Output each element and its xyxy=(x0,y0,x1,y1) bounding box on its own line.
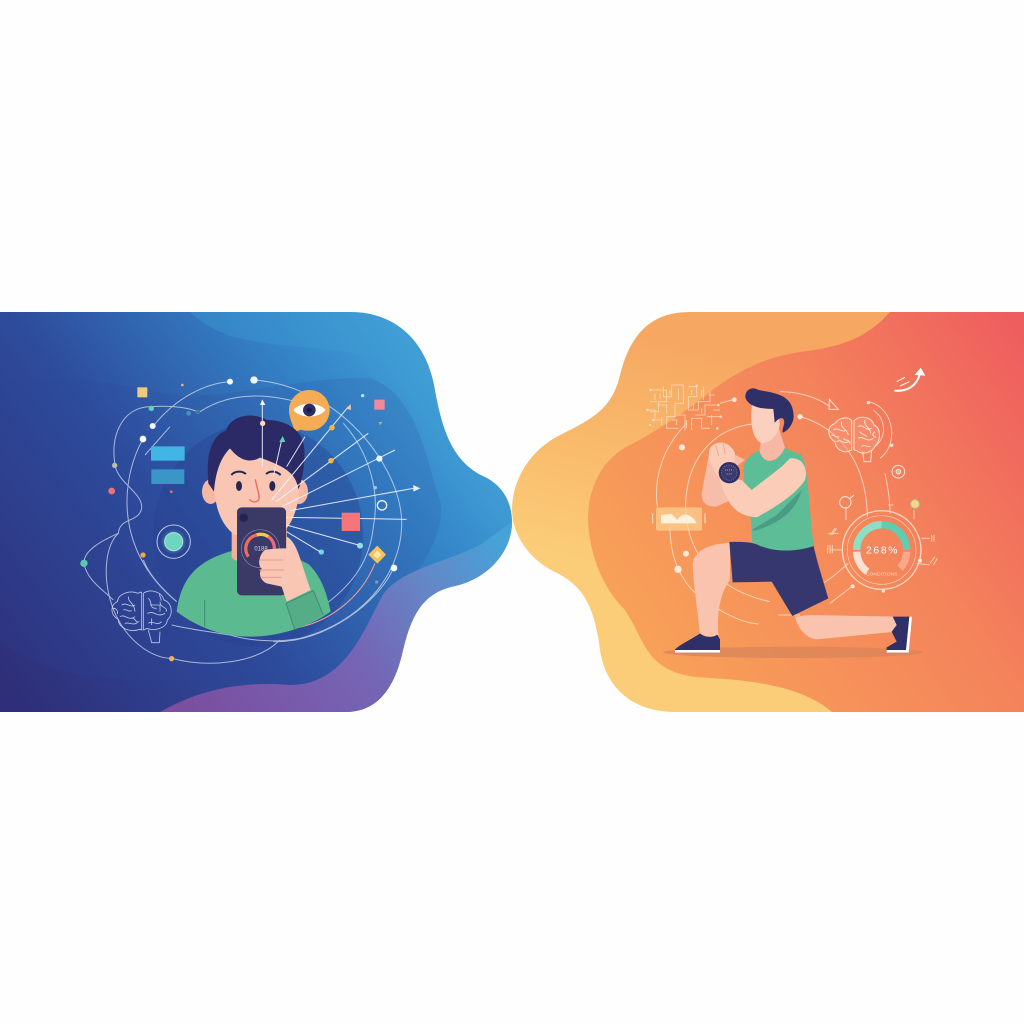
front leg xyxy=(693,543,730,637)
brain icon xyxy=(829,417,879,462)
target dial icon xyxy=(157,525,190,558)
speech bubble with eye xyxy=(289,390,330,432)
signal rays from face xyxy=(262,402,413,552)
front shoe xyxy=(675,633,720,653)
illustration: person looking at phone with radiating signals xyxy=(80,376,420,663)
orbit lines and connectors xyxy=(84,380,402,663)
progress gauge xyxy=(842,511,921,589)
swoosh arrow icon xyxy=(894,368,925,391)
circuit brain icon xyxy=(646,385,722,431)
shaded fold xyxy=(752,490,802,531)
small target and gender icons xyxy=(840,465,919,508)
progress gauge: 268% xyxy=(866,546,897,557)
ground shadow xyxy=(663,647,923,658)
illustration: person lunging with smartwatch and health data xyxy=(646,368,937,658)
phone xyxy=(237,507,286,595)
phone: 0188 xyxy=(254,547,268,553)
shirt xyxy=(177,551,331,637)
neck and head xyxy=(745,388,794,461)
progress gauge: CONDITIONS xyxy=(866,572,898,578)
tank top xyxy=(743,448,814,551)
floating dots and shapes xyxy=(80,376,420,661)
pink arc xyxy=(293,563,375,628)
dots xyxy=(674,397,922,593)
arrow outline xyxy=(829,399,838,409)
shorts xyxy=(729,542,828,616)
head xyxy=(202,416,308,562)
orbit lines xyxy=(656,392,937,624)
rectangular cards xyxy=(151,446,185,484)
smartwatch xyxy=(719,462,740,483)
back shoe xyxy=(887,617,912,653)
hair xyxy=(745,388,794,433)
back leg xyxy=(795,615,897,639)
arms xyxy=(702,443,806,517)
ray markers xyxy=(260,399,382,531)
hand holding phone xyxy=(205,537,323,629)
panel: orange exercise scene background xyxy=(512,312,1024,712)
face details xyxy=(231,472,281,502)
photo card xyxy=(653,507,705,531)
brain outline icon xyxy=(112,591,171,643)
panel: blue phone scene background xyxy=(0,312,512,712)
